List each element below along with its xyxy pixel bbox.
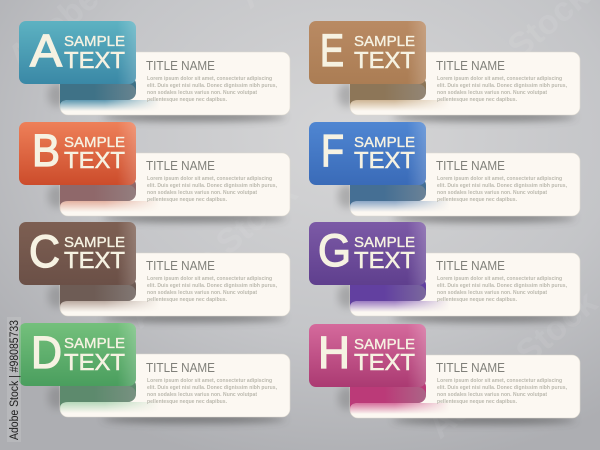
body text bbox=[147, 176, 278, 203]
body text: pellentesque neque nec dapibus. bbox=[437, 297, 518, 303]
text label: TEXT bbox=[354, 349, 415, 375]
colour tab bbox=[19, 222, 136, 285]
card F bbox=[309, 122, 580, 222]
tab highlight bbox=[19, 122, 136, 185]
tab highlight bbox=[19, 222, 136, 285]
colour tab bbox=[19, 21, 136, 84]
body text: Lorem ipsum dolor sit amet, consectetur adipiscing bbox=[147, 76, 272, 82]
text panel bbox=[350, 52, 580, 115]
card G bbox=[309, 222, 580, 322]
body text bbox=[147, 276, 278, 303]
tab highlight bbox=[309, 324, 426, 387]
text label: TEXT bbox=[64, 147, 125, 173]
colour tab bbox=[309, 122, 426, 185]
body text: Lorem ipsum dolor sit amet, consectetur adipiscing bbox=[147, 378, 272, 384]
tab highlight bbox=[309, 21, 426, 84]
fold side shadow bbox=[338, 386, 356, 410]
body text bbox=[437, 276, 568, 303]
fold fade bbox=[350, 100, 444, 110]
watermarks: Adobe Stock bbox=[421, 283, 600, 446]
colour tab bbox=[19, 122, 136, 185]
fold side shadow bbox=[48, 184, 66, 208]
panel shadow bbox=[102, 415, 286, 423]
fold side shadow bbox=[338, 83, 356, 107]
card H bbox=[309, 324, 580, 424]
fold fade bbox=[350, 201, 446, 211]
body text: non sodales lectus varius non. Nunc volutpat bbox=[437, 190, 547, 196]
body text: elit. Duis eget nisi nulla. Donec dignissim nibh purus, bbox=[147, 83, 278, 89]
text label: TEXT bbox=[354, 47, 415, 73]
sample label: SAMPLE bbox=[354, 337, 415, 353]
body text: pellentesque neque nec dapibus. bbox=[147, 399, 228, 405]
fold sheen bbox=[60, 386, 136, 408]
letter: E bbox=[320, 25, 344, 76]
card C bbox=[19, 222, 290, 322]
fold bbox=[350, 177, 426, 207]
card B bbox=[19, 122, 290, 222]
colour tab bbox=[309, 21, 426, 84]
body text: elit. Duis eget nisi nulla. Donec dignissim nibh purus, bbox=[437, 283, 568, 289]
body text: pellentesque neque nec dapibus. bbox=[147, 197, 228, 203]
title name: TITLE NAME bbox=[436, 159, 505, 173]
body text: pellentesque neque nec dapibus. bbox=[437, 399, 518, 405]
panel shadow bbox=[102, 113, 286, 121]
fold bbox=[60, 277, 136, 307]
fold bbox=[350, 379, 426, 409]
text label: TEXT bbox=[64, 47, 125, 73]
fold sheen bbox=[350, 387, 426, 409]
tab highlight bbox=[19, 21, 136, 84]
letter: B bbox=[32, 125, 60, 176]
body text: Lorem ipsum dolor sit amet, consectetur adipiscing bbox=[437, 76, 562, 82]
fold sheen bbox=[60, 185, 136, 207]
tab highlight bbox=[19, 323, 136, 386]
body text: Lorem ipsum dolor sit amet, consectetur adipiscing bbox=[437, 176, 562, 182]
fold side shadow bbox=[48, 83, 66, 107]
fold side shadow bbox=[338, 184, 356, 208]
colour tab bbox=[309, 222, 426, 285]
fold bbox=[60, 177, 136, 207]
body text: non sodales lectus varius non. Nunc volutpat bbox=[147, 190, 257, 196]
body text: pellentesque neque nec dapibus. bbox=[147, 97, 228, 103]
sample label: SAMPLE bbox=[354, 235, 415, 251]
text label: TEXT bbox=[64, 247, 125, 273]
body text: non sodales lectus varius non. Nunc volutpat bbox=[437, 392, 547, 398]
panel shadow bbox=[392, 416, 576, 424]
panel shadow bbox=[102, 314, 286, 322]
title name: TITLE NAME bbox=[436, 361, 505, 375]
body text: Lorem ipsum dolor sit amet, consectetur adipiscing bbox=[437, 276, 562, 282]
card D bbox=[19, 323, 290, 423]
colour tab bbox=[309, 324, 426, 387]
body text: Lorem ipsum dolor sit amet, consectetur adipiscing bbox=[147, 176, 272, 182]
sample label: SAMPLE bbox=[354, 135, 415, 151]
title name: TITLE NAME bbox=[436, 259, 505, 273]
watermarks: Adobe Stock bbox=[121, 173, 304, 336]
body text bbox=[437, 176, 568, 203]
fold fade bbox=[60, 100, 160, 111]
body text: elit. Duis eget nisi nulla. Donec dignissim nibh purus, bbox=[437, 83, 568, 89]
body text: non sodales lectus varius non. Nunc volutpat bbox=[147, 290, 257, 296]
title name: TITLE NAME bbox=[146, 59, 215, 73]
letter: H bbox=[318, 327, 350, 378]
fold sheen bbox=[60, 285, 136, 307]
sample label: SAMPLE bbox=[354, 34, 415, 50]
body text bbox=[437, 378, 568, 405]
text label: TEXT bbox=[354, 147, 415, 173]
tab highlight bbox=[309, 222, 426, 285]
card E bbox=[309, 21, 580, 121]
letter: A bbox=[30, 25, 62, 76]
body text bbox=[437, 76, 568, 103]
fold sheen bbox=[60, 84, 136, 106]
body text: Lorem ipsum dolor sit amet, consectetur adipiscing bbox=[437, 378, 562, 384]
title name: TITLE NAME bbox=[146, 159, 215, 173]
text panel bbox=[350, 153, 580, 216]
text panel bbox=[60, 153, 290, 216]
fold sheen bbox=[350, 84, 426, 106]
fold fade bbox=[350, 301, 450, 312]
title name: TITLE NAME bbox=[146, 259, 215, 273]
fold fade bbox=[60, 201, 154, 211]
body text: pellentesque neque nec dapibus. bbox=[437, 197, 518, 203]
text panel bbox=[60, 52, 290, 115]
fold side shadow bbox=[338, 284, 356, 308]
stock id label: Adobe Stock | #98085733 bbox=[9, 320, 21, 440]
card A bbox=[19, 21, 290, 121]
panel shadow bbox=[102, 214, 286, 222]
title name: TITLE NAME bbox=[436, 59, 505, 73]
text panel bbox=[60, 354, 290, 417]
body text: non sodales lectus varius non. Nunc volutpat bbox=[437, 290, 547, 296]
panel shadow bbox=[392, 113, 576, 121]
body text: elit. Duis eget nisi nulla. Donec dignissim nibh purus, bbox=[437, 183, 568, 189]
body text: elit. Duis eget nisi nulla. Donec dignissim nibh purus, bbox=[437, 385, 568, 391]
letter: G bbox=[318, 225, 351, 276]
text label: TEXT bbox=[64, 349, 125, 375]
fold fade bbox=[60, 402, 153, 412]
sample label: SAMPLE bbox=[64, 135, 125, 151]
letter: C bbox=[29, 226, 60, 277]
title name: TITLE NAME bbox=[146, 361, 215, 375]
text panel bbox=[350, 355, 580, 418]
fold bbox=[350, 76, 426, 106]
fold side shadow bbox=[48, 385, 66, 409]
body text: non sodales lectus varius non. Nunc volutpat bbox=[147, 392, 257, 398]
fold bbox=[60, 378, 136, 408]
panel shadow bbox=[392, 314, 576, 322]
fold side shadow bbox=[48, 284, 66, 308]
body text: non sodales lectus varius non. Nunc volutpat bbox=[147, 90, 257, 96]
body text: pellentesque neque nec dapibus. bbox=[437, 97, 518, 103]
body text: elit. Duis eget nisi nulla. Donec dignissim nibh purus, bbox=[147, 385, 278, 391]
text label: TEXT bbox=[354, 247, 415, 273]
panel shadow bbox=[392, 214, 576, 222]
text panel bbox=[60, 253, 290, 316]
tab highlight bbox=[309, 122, 426, 185]
fold fade bbox=[60, 301, 154, 311]
body text: Lorem ipsum dolor sit amet, consectetur adipiscing bbox=[147, 276, 272, 282]
letter: D bbox=[31, 327, 62, 378]
fold fade bbox=[350, 403, 450, 414]
sample label: SAMPLE bbox=[64, 34, 125, 50]
sample label: SAMPLE bbox=[64, 336, 125, 352]
fold bbox=[60, 76, 136, 106]
fold bbox=[350, 277, 426, 307]
body text: elit. Duis eget nisi nulla. Donec dignissim nibh purus, bbox=[147, 283, 278, 289]
body text: elit. Duis eget nisi nulla. Donec dignissim nibh purus, bbox=[147, 183, 278, 189]
body text bbox=[147, 76, 278, 103]
sample label: SAMPLE bbox=[64, 235, 125, 251]
colour tab bbox=[19, 323, 136, 386]
letter: F bbox=[321, 125, 344, 176]
fold sheen bbox=[350, 185, 426, 207]
body text: pellentesque neque nec dapibus. bbox=[147, 297, 228, 303]
fold sheen bbox=[350, 285, 426, 307]
text panel bbox=[350, 253, 580, 316]
body text: non sodales lectus varius non. Nunc volutpat bbox=[437, 90, 547, 96]
body text bbox=[147, 378, 278, 405]
